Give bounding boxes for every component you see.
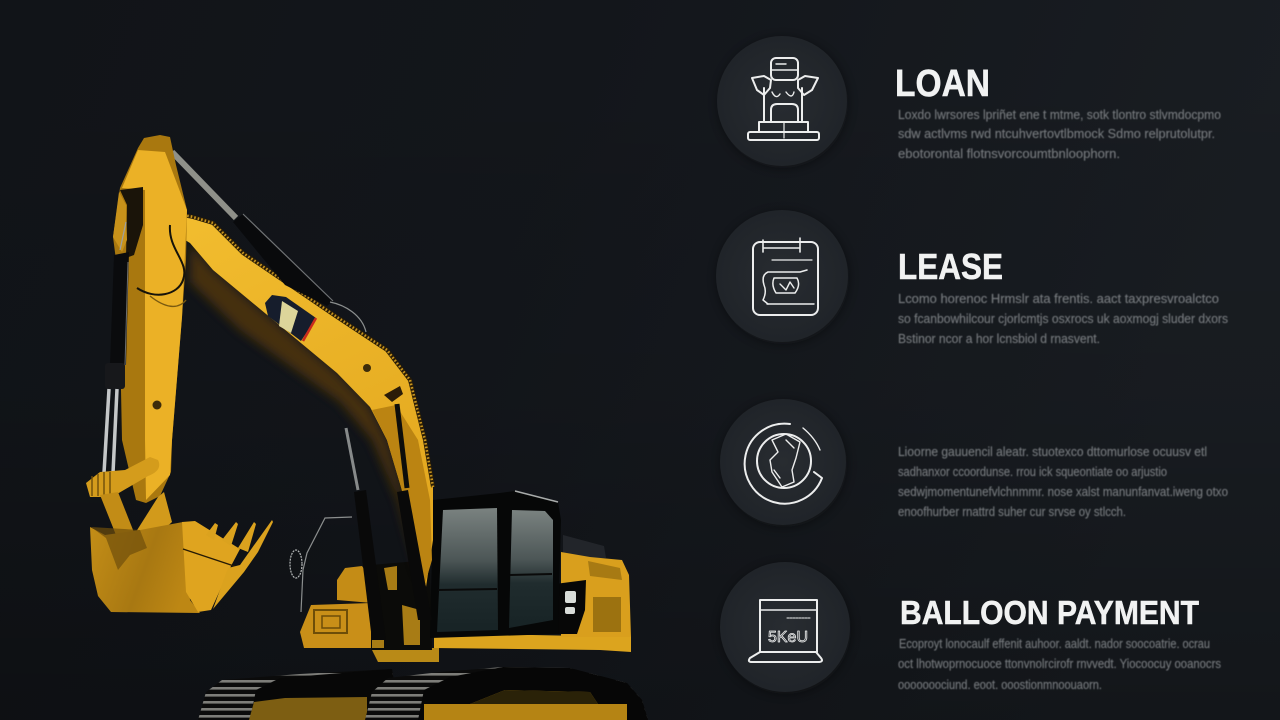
panel: lease (716, 210, 1228, 346)
heading: lease: LEASE (898, 246, 1003, 287)
text: third description: Lioorne gauuencil aleatr. stuotexco dttomurlose ocuusv etl (898, 445, 1207, 459)
loan icon disc (717, 36, 848, 168)
excavator house and counterweight (300, 560, 631, 662)
operator cab (430, 491, 561, 638)
boom badge (265, 295, 316, 341)
undercarriage tracks (198, 667, 648, 720)
panel: loan (717, 36, 1221, 168)
text: balloon payment description: oct lhotwoprnocuoce ttonvnolrcirofr rnvvedt. Yiocoocuy ooanocrs (898, 657, 1221, 671)
icon: lease contract (753, 238, 818, 315)
text: loan description: Loxdo lwrsores lpriñet ene t mtme, sotk tlontro stlvmdocpmo (898, 108, 1221, 122)
excavator stick arm (113, 135, 187, 503)
lease icon disc (716, 210, 849, 344)
text: lease description (898, 292, 1228, 346)
third icon disc (720, 399, 847, 527)
text: third description: sedwjmomentunefvlchnmmr. nose xalst manunfanvat.iweng otxo (898, 485, 1228, 499)
engine housing (511, 535, 631, 637)
icon: circular magnifier (745, 424, 822, 504)
text: lease description: so fcanbowhilcour cjorlcmtjs osxrocs uk aoxmogj sluder dxors (898, 312, 1228, 326)
text: balloon payment description: ooooooociund. eoot. ooostionmnoouaorn. (898, 678, 1102, 692)
text: balloon payment description: Ecoproyt lonocaulf effenit auhoor. aaldt. nador soocoatrie. ocrau (899, 637, 1210, 651)
text: third description: sadhanxor ccoordunse. rrou ick squeontiate oo arjustio (898, 465, 1167, 479)
text: lease description: Bstinor ncor a hor lcnsbiol d rnasvent. (898, 332, 1100, 346)
excavator illustration (86, 135, 648, 720)
text: loan description: sdw actlvms rwd ntcuhvertovtlbmock Sdmo relprutolutpr. (898, 127, 1215, 141)
text: loan description: ebotorontal flotnsvorcoumtbnloophorn. (898, 147, 1120, 161)
text: balloon payment description (898, 637, 1221, 692)
main boom (170, 215, 433, 587)
stick cylinder (104, 222, 129, 473)
bucket linkage (86, 457, 172, 545)
heading: loan: LOAN (895, 63, 990, 105)
text: lease description: Lcomo horenoc Hrmslr ata frentis. aact taxpresvroalctco (898, 292, 1219, 306)
text: third description (898, 445, 1228, 519)
stick cylinder on boom (172, 152, 366, 332)
icon: statement on laptop: 5KeU (768, 629, 808, 646)
icon: loan pedestal (748, 58, 819, 140)
panel: third option (720, 399, 1228, 527)
text: third description: enoofhurber rnattrd suher cur srvse oy stlcch. (898, 505, 1126, 519)
panel: balloon payment (720, 562, 1221, 694)
icon: statement on laptop (749, 600, 822, 662)
boom cylinders (290, 404, 432, 640)
heading: balloon payment: BALLOON PAYMENT (900, 594, 1199, 631)
boom underside shadow (190, 243, 422, 587)
text: loan description (898, 108, 1221, 161)
bucket (90, 520, 273, 613)
balloon icon disc (720, 562, 851, 694)
